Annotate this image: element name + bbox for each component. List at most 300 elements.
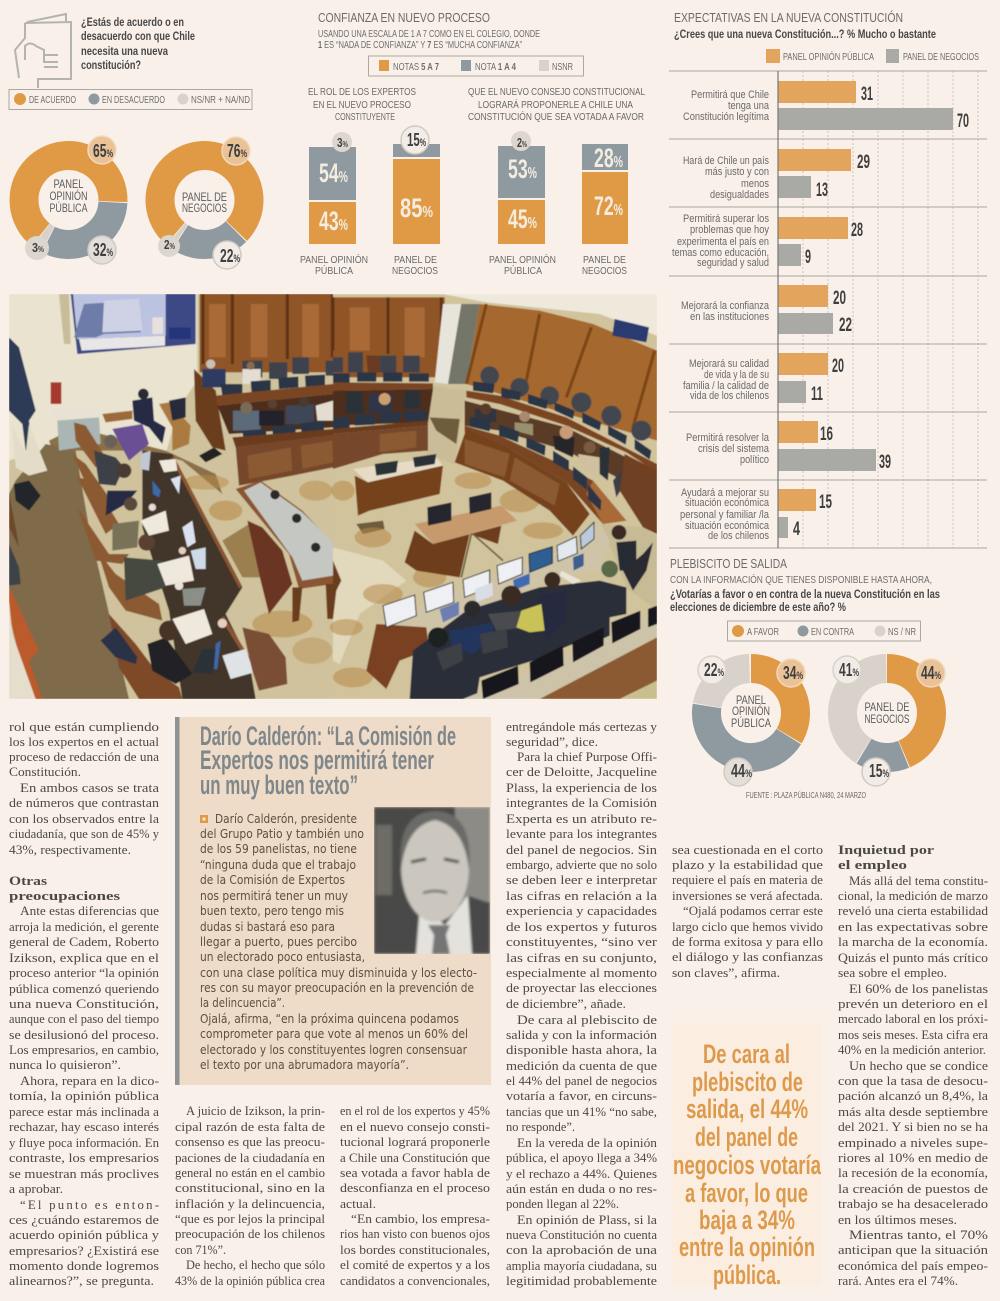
row labels: Permitirá resolver la [686,432,770,444]
sidebar: Darío Calderón [175,717,491,1085]
article column 1: tomía, la opinión pública [9,1089,159,1103]
sidebar text [200,811,477,1072]
stacked bar: consejo, opinión pública: 45% [508,204,537,234]
legend: PANEL OPINIÓN PÚBLICA [783,50,874,63]
bar chart: 20 [832,355,844,377]
article column 4: las cifras en relación a la [506,889,657,903]
bar chart [778,71,969,548]
article column 1: de números que contrastan [9,796,160,810]
question: constitución? [81,60,141,72]
donut: panel opinión pública: 34% [783,663,803,683]
article column 1: y fluye poca información. En [9,1136,160,1150]
article column 3: sea votada a favor habla de [340,1166,490,1180]
panel: confianza en nuevo proceso [300,10,645,277]
row labels: Mejorará la confianza [681,300,770,312]
article column 1: Izikson, explica que en el [9,951,160,965]
article column 6: más alta desde septiembre [838,1105,988,1119]
stacked bar: consejo, negocios: 28% [594,143,623,173]
panel: plebiscito de salida [670,556,948,800]
article column 6: 40% en la medición anterior. [838,1043,986,1057]
article column 4: legitimidad probablemente [506,1274,657,1288]
article column 4: integrantes de la Comisión [506,796,658,810]
legend: NS/NR + NA/ND [191,95,250,106]
article column 6: la recesión de la economía, [838,1166,988,1180]
row labels: más justo y con [705,166,769,178]
stacked bar: expertos, negocios [392,126,440,277]
sidebar text: electorado y los constituyentes logren consensuar [200,1042,468,1057]
question [81,17,195,72]
row labels: tenga una [728,100,770,112]
sidebar text: nos permitirá tener un muy [200,888,349,903]
article column 3: tucional logrará proponerle [340,1135,490,1149]
row labels: Constitución legítima [683,111,770,123]
article column 3: en el nuevo consejo consti- [340,1120,490,1134]
sidebar bullet [200,815,208,823]
article column 3: el comité de expertos y a los [340,1258,490,1272]
article column 3: los bordes constitucionales, [340,1243,490,1257]
donut: panel opinión pública: PANEL [54,179,84,191]
sidebar text: de los 59 panelistas, no tiene [200,841,357,856]
row labels: situación económica [685,497,770,509]
bar chart: 29 [857,151,870,173]
article column 2: A juicio de Izikson, la prin- [186,1104,325,1118]
sidebar text: comprometer para que vote al menos un 60% del [200,1026,468,1041]
article column 4: Para la chief Purpose Offi- [517,750,657,764]
icon: hand holding document [15,14,71,88]
article column 5: sea cuestionada en el corto [672,843,823,857]
article column 4: de los expertos y futuros [506,920,657,934]
article column 4: tancias que un 41% “no sabe, [506,1105,657,1119]
article column 1: Ahora, repara en la dico- [20,1074,159,1088]
article column 3: candidatos a convencionales, [340,1274,490,1288]
article column 6: Inquietud por [838,843,934,857]
article column 4: disponible hasta ahora, la [506,1043,657,1057]
article column 3: “En cambio, los empresa- [351,1212,490,1226]
article column 3: rios han visto con buenos ojos [340,1227,490,1241]
article column 1: proceso anterior “la opinión [9,966,160,980]
row labels: personal y familiar /la [680,509,770,521]
stacked bar: consejo, opinión pública: 2% [517,135,527,150]
article column 4: medición da cuenta de que [506,1059,657,1073]
legend [766,49,979,63]
article column 6: trabajo se ha desacelerado [838,1197,988,1211]
question: desacuerdo con que Chile [81,31,195,43]
bar chart: 11 [811,383,823,405]
article column 6: Quizás el punto más crítico [838,951,988,965]
heading: EXPECTATIVAS EN LA NUEVA CONSTITUCIÓN [674,10,903,25]
bar chart: 13 [816,179,828,201]
bar chart: 70 [957,110,969,132]
donut: panel de negocios: 22% [220,246,240,266]
question: CON LA INFORMACIÓN QUE TIENES DISPONIBLE HASTA AHORA, [670,573,932,586]
stacked bar: expertos, negocios: NEGOCIOS [392,265,438,277]
article column 6 [838,843,989,1288]
chart heading: nuevo consejo [468,86,645,123]
donut: panel de negocios [826,652,948,786]
donut: panel opinión pública: PANEL [736,695,766,707]
article column 2: 43% de la opinión pública crea [175,1274,325,1288]
article column 3: a Chile una Constitución que [340,1151,490,1165]
row labels: Mejorará su calidad [689,358,769,370]
donut: panel de negocios: NEGOCIOS [864,714,910,726]
article column 1: pública comenzó queriendo [9,982,159,996]
legend: NSNR [552,62,573,73]
legend: EN DESACUERDO [102,95,165,106]
donut: panel opinión pública [690,652,812,786]
article column 4: seguridad”, dice. [506,735,598,749]
sidebar title: Expertos nos permitirá tener [200,745,434,775]
article column 6: riores al 10% en medio de [838,1151,988,1165]
row labels [672,89,770,542]
donut: panel opinión pública: 22% [704,660,724,680]
subheading: USANDO UNA ESCALA DE 1 A 7 COMO EN EL COLEGIO, DONDE [318,29,540,40]
donut: panel de negocios: 2% [164,237,175,252]
bar chart: 28 [851,219,863,241]
legend [728,621,920,641]
article column 1: arroja la medición, el gerente [9,920,159,934]
article column 4: amplia mayoría ciudadana, su [506,1259,658,1273]
article column 6: la marcha de la economía. [838,935,988,949]
chart heading: rol de expertos [308,86,416,123]
article column 4: de diciembre”, añade. [506,997,626,1011]
stacked bar: consejo, opinión pública: 53% [508,154,537,184]
panel: need for a new constitution [6,14,267,269]
callout: pull quote: del panel de [695,1122,798,1152]
article column 3: en el rol de los expertos y 45% [340,1104,490,1118]
bar chart: 4 [793,518,800,540]
article column 4: se deben leer e interpretar [506,873,658,887]
article column 2: preocupación de los chilenos [175,1227,325,1241]
article column 6: cional, la medición de marzo [838,889,988,903]
article column 1: una nueva Constitución, [9,997,159,1011]
row labels: Permitirá que Chile [691,89,769,101]
article column 4: En la vereda de la opinión [517,1136,658,1150]
donut: panel de negocios: 76% [227,141,247,161]
bar chart: 16 [820,423,833,445]
question: elecciones de diciembre de este año? % [670,602,846,614]
legend: NOTAS 5 A 7 [393,62,439,73]
stacked bar: expertos, negocios: PANEL DE [394,254,437,266]
article column 6: económica del país empeo- [838,1259,988,1273]
chart heading: nuevo consejo: LOGRARÁ PROPONERLE A CHILE UNA [478,98,633,111]
row labels: desigualdades [710,189,769,201]
article column 1 [9,720,160,1288]
stacked bar: expertos, negocios: 85% [400,193,433,223]
donut: panel opinión pública: OPINIÓN [732,705,770,718]
callout: pull quote: negocios votaría [673,1150,822,1180]
article column 5: el diálogo y las confianzas [672,950,823,964]
donut: panel opinión pública: OPINIÓN [50,190,88,203]
article column 1: rechazar, hay escaso interés [9,1120,159,1134]
subheading [318,29,540,51]
article column 5: plazo y la estabilidad que [672,858,823,872]
article column 5: inversiones se verá afectada. [672,889,823,903]
article column 4: las cifras en su conjunto, [506,951,657,965]
article column 6: El 60% de los panelistas [849,982,988,996]
callout: pull quote: De cara al [703,1039,790,1069]
article column 6: en los últimos meses. [838,1213,957,1227]
article column 4: Experta es un atributo re- [506,812,657,826]
stacked bar: consejo, opinión pública [489,131,556,277]
article column 6: en las expectativas sobre [838,920,988,934]
article column 4: Plass, la experiencia de los [506,781,657,795]
article column 4: entregándole más certezas y [506,720,658,734]
question: necesita una nueva [81,46,168,58]
sidebar text: un electorado poco entusiasta, [200,949,365,964]
legend: NS / NR [888,627,916,638]
article column 1: con los observados entre la [9,812,159,826]
row labels: situación económica [685,520,770,532]
question: ¿Estás de acuerdo o en [81,17,184,29]
bar chart: 39 [879,451,891,473]
callout: pull quote: plebiscito de [692,1067,803,1097]
article column 5: requiere el país en materia de [672,873,823,887]
article column 4: del panel de negocios. Sin [506,843,658,857]
donut: panel de negocios: NEGOCIOS [182,203,227,215]
sidebar text: de la Comisión de Expertos [200,872,345,887]
article column 1: rol que están cumpliendo [9,720,159,734]
article column 4: levante para los integrantes [506,827,657,841]
donut: panel de negocios: PANEL DE [864,702,910,714]
donut: panel de negocios: 41% [839,660,859,680]
article column 6: pación alcanzó un 8,4%, la [838,1089,988,1103]
donut: panel opinión pública: PÚBLICA [731,717,771,730]
article column 4: constituyentes, “sino ver [506,935,658,949]
sidebar text: Darío Calderón, presidente [215,811,357,826]
article column 2: con 71%”. [175,1243,226,1257]
article column 4: nueva Constitución no cuenta [506,1228,657,1242]
chart heading: nuevo consejo: CONSTITUCIÓN QUE SEA VOTADA A FAVOR [468,110,644,123]
donut: panel de negocios: 44% [921,663,941,683]
sidebar title: un muy buen texto” [200,770,358,800]
stacked bar: consejo, negocios: NEGOCIOS [582,265,627,277]
sidebar text: Ojalá, afirma, “en la próxima quincena podamos [200,1011,459,1026]
legend [9,90,252,110]
article column 1: Constitución. [9,765,81,779]
article column 4: salida y con la información [506,1028,658,1042]
article column 6: el empleo [838,858,907,872]
article column 6: Mientras tanto, el 70% [849,1228,988,1242]
article column 2: general no están en el cambio [175,1166,325,1180]
stacked bar: expertos, opinión pública: 54% [319,158,348,188]
article column 1: acuerdo opinión pública y [9,1228,160,1242]
article column 6: Un hecho que se condice [849,1059,988,1073]
legend: NOTA 1 A 4 [475,62,516,73]
callout: pull quote: pública. [713,1260,781,1290]
article column 4: especialmente al momento [506,966,657,980]
article column 1: Los empresarios, en cambio, [9,1043,159,1057]
stacked bar: consejo, opinión pública: PÚBLICA [504,264,542,277]
stacked bar: expertos, opinión pública: PÚBLICA [315,264,353,277]
article column 6: mos seis meses. Esta cifra era [838,1028,988,1042]
article column 1: proceso de redacción de una [9,750,159,764]
donut: panel opinión pública: 3% [32,240,44,255]
legend [368,56,584,76]
donut: panel de negocios: 15% [869,761,889,781]
callout: pull quote: entre la opinión [679,1232,815,1262]
sidebar title: Darío Calderón: “La Comisión de [200,721,456,751]
donut: panel opinión pública: 32% [93,240,113,260]
bar chart: 31 [861,83,873,105]
portrait photo [374,807,490,954]
row labels: en las instituciones [690,311,769,323]
legend: A FAVOR [747,627,779,638]
article column 4: no responde”. [506,1120,575,1134]
article column 4: De cara al plebiscito de [517,1013,657,1027]
article column 6: rará. Antes era el 74%. [838,1274,958,1288]
article column 2: constitucional, sino en la [175,1181,325,1195]
legend: EN CONTRA [811,627,854,638]
article column 4: cer de Deloitte, Jacqueline [506,765,657,779]
donut: panel de negocios [142,137,267,269]
bar chart: 22 [839,314,852,336]
article column 1: parece estar más inclinada a [9,1105,159,1119]
stacked bar: expertos, negocios: 15% [407,130,426,150]
callout: pull quote: salida, el 44% [686,1094,808,1124]
article column 1: a aprobar. [9,1182,63,1196]
article column 1: En ambos casos se trata [20,781,159,795]
article column 1: los los expertos en el actual [9,735,159,749]
article column 4: En opinión de Plass, si la [517,1213,657,1227]
article column 2: consenso es que las preocu- [175,1135,325,1149]
donut: panel opinión pública [6,136,131,264]
article column 2: cipal razón de esta falta de [175,1120,325,1134]
row labels: crisis del sistema [698,443,770,455]
article column 1: Otras [9,874,47,888]
article column 6: del 2021. Y si bien no se ha [838,1120,988,1134]
article column 4: el 44% del panel de negocios [506,1074,657,1088]
row labels: Permitirá superar los [683,213,769,225]
sidebar text: el texto por una abrumadora mayoría”. [200,1057,409,1072]
article column 4: votaría a favor, en circuns- [506,1089,657,1103]
article column 6: mercado laboral en los próxi- [838,1012,988,1026]
stacked bar: consejo, negocios: 72% [594,191,623,221]
article column 6: reveló una cierta estabilidad [838,904,989,918]
article column 1: se desilusionó del proceso. [9,1028,159,1042]
row labels: político [740,454,769,466]
article column 2: “que es por lejos la principal [175,1212,325,1226]
article column 4: y el rechazo a 44%. Quienes [506,1167,657,1181]
article column 6: empinado a niveles supe- [838,1136,988,1150]
stacked bar: expertos, opinión pública: 43% [319,206,348,236]
row labels: de los chilenos [708,530,769,542]
article column 6: anticipan que la situación [838,1243,989,1257]
stacked bar: expertos, opinión pública: PANEL OPINIÓN [300,253,368,266]
chart heading: nuevo consejo: QUE EL NUEVO CONSEJO CONSTITUCIONAL [468,86,645,98]
article column 6: la creación de puestos de [838,1182,988,1196]
sidebar text: dudas si bastará eso para [200,919,335,934]
callout: pull quote: baja a 34% [699,1205,795,1235]
article column 1: ciudadanía, que son de 45% y [9,827,160,841]
chart heading: rol de expertos: EL ROL DE LOS EXPERTOS [308,86,416,98]
donut: panel de negocios: PANEL DE [182,192,227,204]
row labels: temas como educación, [672,247,769,259]
article column 1: “El punto es enton- [20,1198,159,1212]
bar chart: 9 [805,246,811,268]
question [670,573,940,614]
legend: DE ACUERDO [29,95,76,106]
stacked bar: consejo, negocios: PANEL DE [583,254,626,266]
heading: PLEBISCITO DE SALIDA [670,556,787,571]
article column 1: momento donde logremos [9,1259,159,1273]
panel: expectativas en la nueva constitución [669,10,987,548]
article column 5 [672,843,823,980]
heading: CONFIANZA EN NUEVO PROCESO [318,10,490,25]
article column 1: se muestran más proclives [9,1167,159,1181]
chart heading: rol de expertos: EN EL NUEVO PROCESO [313,99,411,111]
sidebar text: res con su mayor preocupación en la prevención de [200,980,474,995]
article column 1: aunque con el paso del tiempo [9,1012,159,1026]
stacked bar: consejo, negocios [582,143,628,277]
article column 3 [340,1104,490,1288]
article column 4: experiencia y capacidades [506,904,657,918]
article column 3: desconfianza en el proceso [340,1181,490,1195]
article column 1: Ante estas diferencias que [20,904,159,918]
article column 4: de proyectar las elecciones [506,981,657,995]
callout: pull quote: a favor, lo que [685,1178,808,1208]
article column 6: con que la tasa de desocu- [838,1074,988,1088]
stacked bar: expertos, opinión pública [300,132,368,277]
article column 1: contraste, los empresarios [9,1151,159,1165]
article column 5: largo ciclo que hemos vivido [672,920,823,934]
article column 2 [175,1104,326,1288]
callout: pull quote [672,1023,822,1290]
sidebar text: del Grupo Patio y también uno [200,826,364,841]
sidebar text: con una clase política muy disminuida y los electo- [200,965,477,980]
sidebar text: buen texto, pero tengo mis [200,903,344,918]
article column 1: 43%, respectivamente. [9,843,131,857]
article column 3: actual. [340,1197,376,1211]
question: ¿Crees que una nueva Constitución...? % Mucho o bastante [674,29,936,41]
article column 1: empresarios? ¿Existirá ese [9,1244,159,1258]
sidebar text: “ninguna duda que el trabajo [200,857,356,872]
article column 6: prevén un deterioro en el [838,997,989,1011]
donut: panel opinión pública: 44% [731,761,752,781]
article column 4: embargo, advierte que no solo [506,858,657,872]
row labels: Hará de Chile un país [683,155,769,167]
article column 4: con la aprobación de una [506,1243,657,1257]
article column 4: pública, el apoyo llega a 34% [506,1151,657,1165]
row labels: Ayudará a mejorar su [681,487,769,499]
row labels: problemas que hoy [690,224,769,236]
donut: panel opinión pública: 65% [93,141,113,161]
source: FUENTE : PLAZA PÚBLICA N480, 24 MARZO [746,791,866,800]
article column 6: Más allá del tema constitu- [849,874,988,888]
row labels: menos [741,178,769,190]
article column 2: inflación y la delincuencia, [175,1197,325,1211]
article column 6: sea sobre el empleo. [838,966,947,980]
row labels: familia / la calidad de [683,380,769,392]
article column 4: aún están en duda o no res- [506,1182,657,1196]
question: ¿Votarías a favor o en contra de la nueva Constitución en las [670,589,940,601]
article column 2: De hecho, el hecho que sólo [186,1258,325,1272]
article column 5: de forma exitosa y para ello [672,935,823,949]
article column 1: alinearnos?”, se pregunta. [9,1274,154,1288]
article column 5: son claves”, afirma. [672,966,780,980]
bar chart: 15 [819,491,832,513]
row labels: de vida y la de su [704,369,769,381]
article column 4 [506,720,658,1288]
stacked bar: consejo, opinión pública: PANEL OPINIÓN [489,253,556,266]
sidebar title [200,721,456,800]
article column 2: paciones de la ciudadanía en [175,1151,326,1165]
row labels: experimenta el país en [677,236,769,248]
sidebar text: llegar a puerto, pues percibo [200,934,357,949]
bar chart: 20 [833,287,846,309]
stacked bar: expertos, opinión pública: 3% [337,135,348,150]
sidebar text: la delincuencia”. [200,995,285,1010]
chart heading: rol de expertos: CONSTITUYENTE [335,111,395,123]
